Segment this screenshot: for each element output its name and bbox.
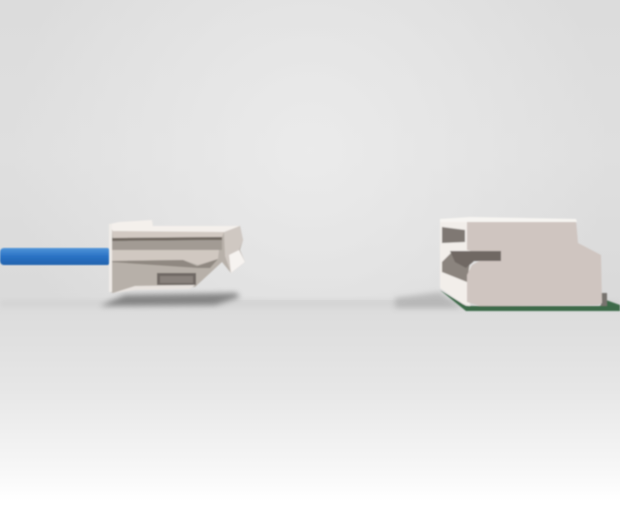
receptacle connector [440, 217, 620, 311]
plug latch shadow [110, 259, 218, 268]
circuit board [440, 290, 620, 311]
top edge highlight [440, 217, 577, 222]
plug left edge highlight [109, 224, 112, 292]
plug nose [224, 226, 245, 273]
plug body [110, 221, 245, 293]
lower opening [442, 252, 470, 282]
plug top edge highlight [110, 220, 240, 232]
plug recess shadow [112, 237, 222, 241]
receptacle side wall [467, 220, 602, 306]
plug latch arm [110, 250, 219, 265]
plug bottom highlight [113, 285, 195, 293]
board pin [601, 293, 607, 306]
blue wire [0, 248, 111, 265]
plug side window [157, 273, 196, 285]
latch slot [450, 251, 501, 268]
receptacle front frame [440, 218, 470, 306]
plug connector [109, 220, 245, 293]
upper slot [442, 227, 465, 243]
floor shadows [0, 292, 620, 308]
plug upper rail [112, 231, 224, 238]
